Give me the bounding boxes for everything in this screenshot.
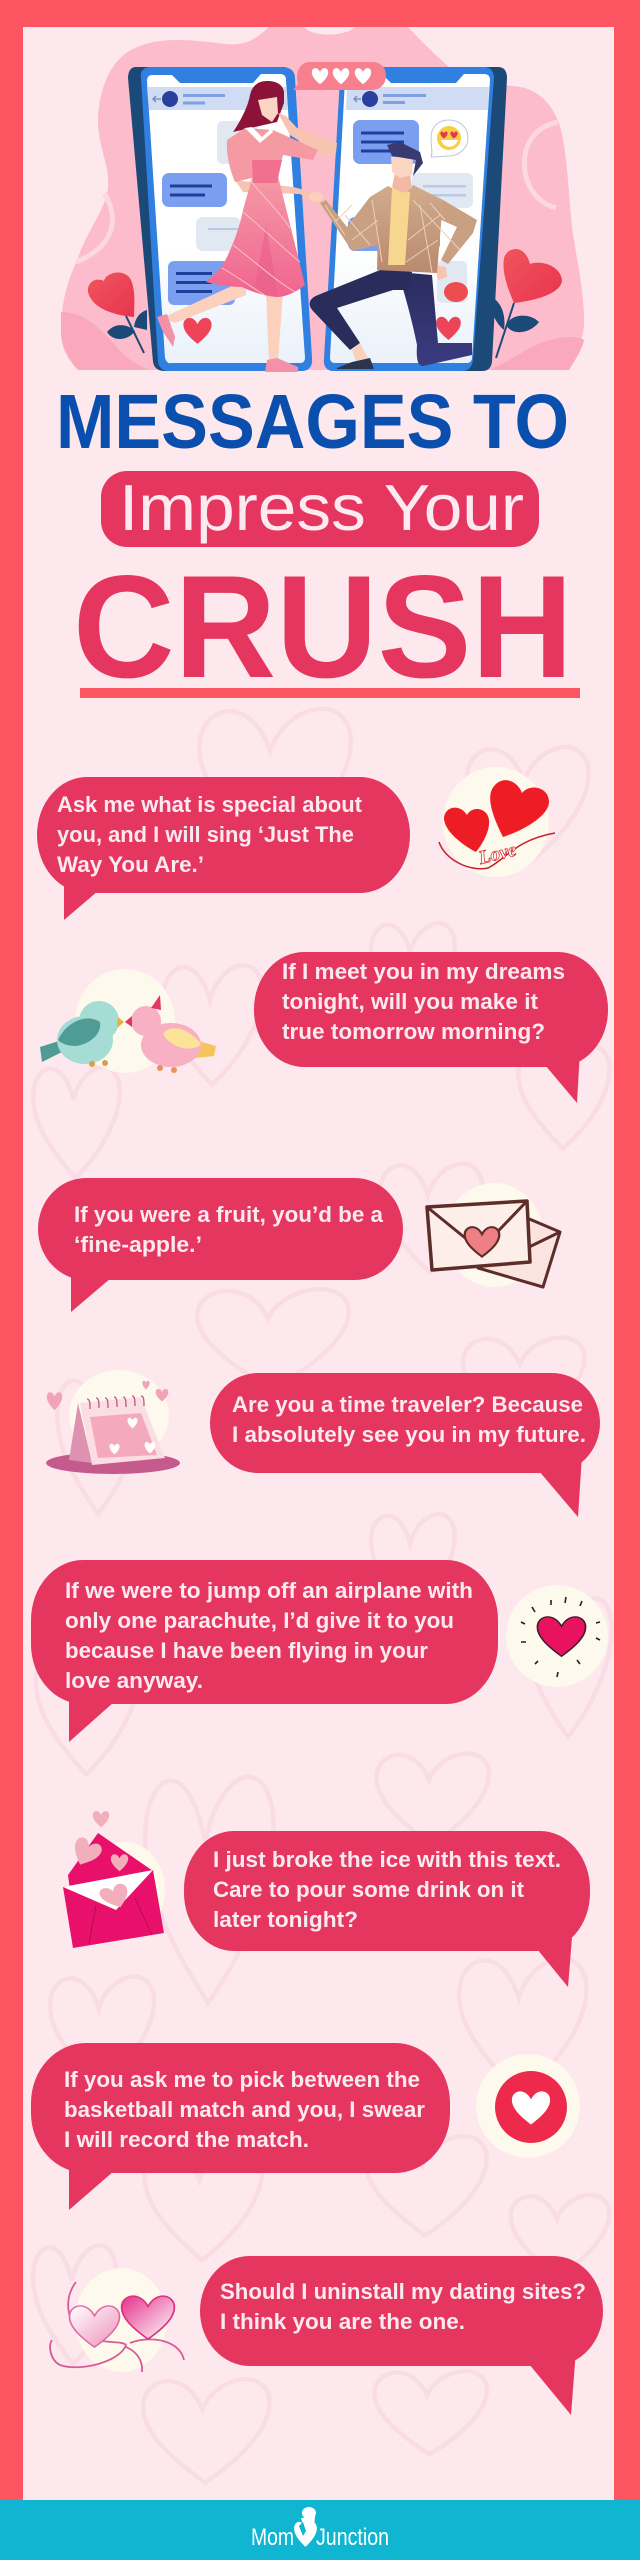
message 7 [31, 2043, 450, 2210]
logo wordmark: Mom [251, 2524, 294, 2551]
rear leg [398, 272, 472, 366]
back envelope [478, 1218, 560, 1287]
message text [220, 2279, 586, 2334]
icon: entwined hearts [50, 2268, 184, 2372]
message 3 [38, 1178, 403, 1312]
wax heart [465, 1227, 499, 1257]
message text: because I have been flying in your [65, 1638, 428, 1663]
right sleeve [430, 197, 477, 264]
base shadow [46, 1452, 180, 1474]
message text [282, 959, 565, 1044]
icon: love letters [427, 1183, 560, 1287]
reaching arm [235, 180, 320, 205]
message text: If we were to jump off an airplane with [65, 1578, 473, 1603]
calendar rings [87, 1396, 144, 1409]
calendar page [80, 1397, 165, 1465]
left heart [69, 2306, 120, 2347]
neck [392, 173, 412, 193]
title underline [80, 688, 580, 698]
logo wordmark: Junction [316, 2524, 389, 2551]
message text: later tonight? [213, 1907, 358, 1932]
message 5 [31, 1560, 498, 1742]
message text [57, 792, 363, 877]
face [391, 157, 413, 178]
hearts [68, 1811, 134, 1911]
skirt fold [255, 225, 278, 297]
phone frame [324, 67, 494, 371]
left sleeve [320, 197, 378, 251]
speech bubble [254, 952, 608, 1103]
message 1 [37, 777, 410, 920]
message text: basketball match and you, I swear [64, 2097, 425, 2122]
stem and leaves [107, 310, 147, 353]
pink bird [125, 995, 216, 1073]
hair [233, 81, 284, 132]
background heart pattern [33, 709, 612, 2482]
avatar [162, 91, 178, 107]
speech bubble [31, 2043, 450, 2210]
message text [65, 1578, 473, 1693]
phone frame [141, 67, 312, 371]
title: Crush: CRUSH [73, 545, 573, 708]
pill text: Impress Your [119, 471, 524, 544]
message text [232, 1392, 586, 1447]
message text: Ask me what is special about [57, 792, 363, 817]
sock and shoe [337, 343, 374, 369]
envelope body [63, 1870, 164, 1948]
icon: heart in circle [476, 2054, 580, 2158]
title pill [101, 471, 539, 547]
envelope flap [68, 1833, 153, 1890]
waistband [252, 160, 282, 183]
chat header [147, 87, 288, 110]
emoji speech bubble [431, 120, 468, 157]
message 4 [210, 1373, 600, 1517]
header lines [383, 94, 426, 104]
message text: I just broke the ice with this text. [213, 1847, 561, 1872]
message text [74, 1202, 384, 1257]
swirls [50, 2282, 184, 2372]
chat bubbles [162, 121, 257, 305]
speech bubble [37, 777, 410, 920]
phone body [128, 67, 300, 371]
flower heart [88, 273, 134, 317]
stem and leaves [491, 297, 539, 358]
left heart flower [88, 273, 147, 353]
speech bubble [184, 1831, 590, 1987]
dress skirt [206, 176, 305, 297]
jacket body [370, 185, 443, 273]
message 8 [200, 2256, 603, 2415]
message text [213, 1847, 561, 1932]
speech bubble [38, 1178, 403, 1312]
message text: only one parachute, I’d give it to you [65, 1608, 454, 1633]
message 6 [184, 1831, 590, 1987]
message text: If you ask me to pick between the [64, 2067, 420, 2092]
message text: Care to pour some drink on it [213, 1877, 525, 1902]
speech bubble [200, 2256, 603, 2415]
message text: tonight, will you make it [282, 989, 539, 1014]
message text: ‘fine-apple.’ [74, 1232, 202, 1257]
face [258, 97, 278, 122]
left phone [128, 67, 312, 371]
man figure [309, 142, 477, 369]
lower wave shapes [61, 312, 584, 370]
phone screen [147, 74, 305, 363]
reaching hand [309, 192, 323, 202]
footer bar [0, 2500, 640, 2560]
rays [521, 1597, 600, 1677]
calendar hearts [109, 1418, 155, 1455]
icon: kissing birds [40, 969, 216, 1073]
message text [64, 2067, 425, 2152]
footer background [0, 2500, 640, 2560]
front leg [310, 266, 412, 350]
standing leg [266, 292, 283, 361]
phone screen [330, 74, 490, 363]
avatar [362, 91, 378, 107]
message text: Are you a time traveler? Because [232, 1392, 583, 1417]
calendar stand [69, 1403, 92, 1463]
logo mark [294, 2507, 317, 2547]
right heart [122, 2296, 174, 2339]
logo wordmark [251, 2524, 389, 2551]
hand on hip [435, 265, 447, 280]
phone body [400, 67, 507, 371]
letter [63, 1870, 153, 1910]
dress lines [222, 180, 300, 297]
plaid lines [325, 200, 460, 272]
icon: open envelope [63, 1811, 165, 1948]
teal bird [40, 1001, 124, 1067]
header lines [183, 94, 225, 104]
message text: you, and I will sing ‘Just The [57, 822, 354, 847]
right heart flower [491, 249, 562, 358]
envelope seams [89, 1898, 152, 1944]
back leg [162, 280, 246, 323]
hearts speech pill [293, 62, 386, 90]
floating hearts [47, 1381, 168, 1410]
collar [245, 127, 273, 143]
message text: If you were a fruit, you’d be a [74, 1202, 384, 1227]
message text: If I meet you in my dreams [282, 959, 565, 984]
title: Messages to: MESSAGES TO [56, 379, 569, 465]
message text: I will record the match. [64, 2127, 309, 2152]
woman figure [157, 81, 337, 372]
icon: calendar [46, 1370, 180, 1474]
date grid [90, 1413, 157, 1458]
top notch highlight [304, 27, 355, 34]
shirt [388, 188, 410, 265]
chat header [346, 87, 489, 110]
pink blob backdrop [61, 27, 584, 370]
speech bubble [31, 1560, 498, 1742]
right phone [324, 67, 507, 371]
flower heart [503, 249, 562, 303]
backdrop rings [76, 122, 558, 262]
pill background [101, 471, 539, 547]
shoes [157, 314, 298, 372]
icon: love hearts [439, 767, 555, 877]
back arrow [153, 96, 161, 102]
message text: I absolutely see you in my future. [232, 1422, 586, 1447]
raised arm [278, 113, 337, 157]
speech bubble [210, 1373, 600, 1517]
dress bodice and sleeves [227, 128, 318, 182]
message 2 [254, 952, 608, 1103]
message text: love anyway. [65, 1668, 203, 1693]
heart and rose [436, 282, 468, 340]
chat bubbles [348, 120, 473, 303]
hair [387, 142, 423, 176]
heart [537, 1617, 586, 1656]
small heart [183, 318, 212, 344]
message text: Should I uninstall my dating sites? [220, 2279, 586, 2304]
icon: love hearts: Love [476, 839, 519, 869]
back arrow [354, 96, 361, 102]
icon: heart with rays [506, 1585, 608, 1687]
front envelope [427, 1201, 530, 1270]
message text: I think you are the one. [220, 2309, 465, 2334]
message text: Way You Are.’ [57, 852, 204, 877]
header illustration [61, 27, 584, 372]
message text: true tomorrow morning? [282, 1019, 545, 1044]
